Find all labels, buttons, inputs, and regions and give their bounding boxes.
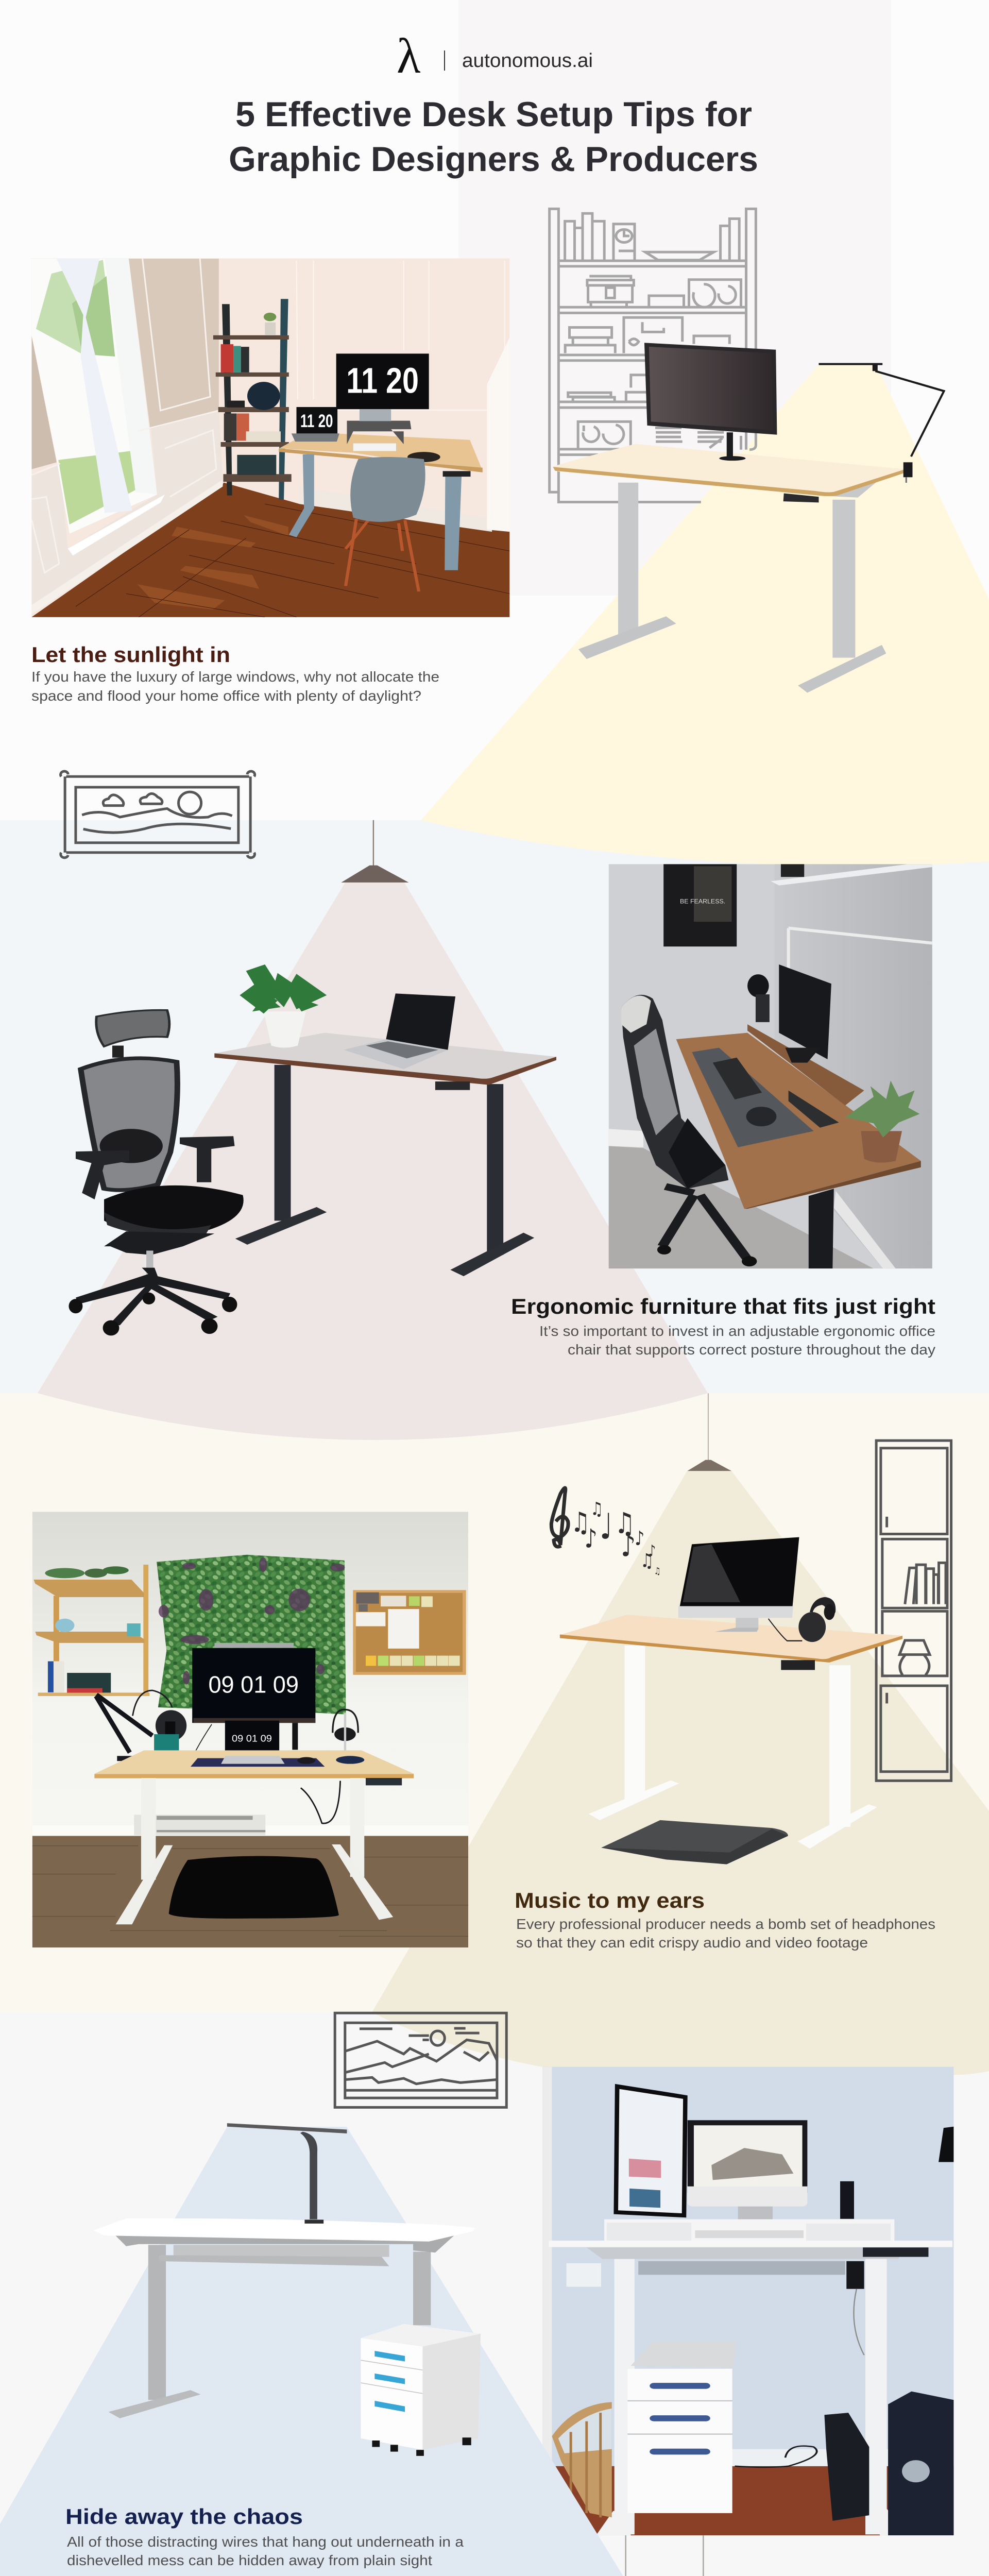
light cone: pendant lamp, section 2: [38, 883, 708, 1440]
basket: [552, 2402, 612, 2517]
photo: sunlit home office: 11 20: [346, 360, 419, 401]
wooden shelves: [143, 1565, 148, 1696]
mic boom arm: [96, 1694, 152, 1753]
desk leg: [809, 1189, 834, 1268]
desk top: [560, 1615, 902, 1662]
photo: producer desk with green wall: [32, 1512, 468, 1947]
logo mark: λ: [397, 28, 421, 83]
desk riser: [604, 2219, 894, 2243]
computer: [680, 1537, 799, 1606]
monitor: [779, 964, 831, 1059]
music notes: ♫: [591, 1499, 603, 1520]
text block: tip 4: All of those distracting wires that hang out underneath in a: [67, 2534, 464, 2550]
text block: tip 4: Hide away the chaos: [65, 2504, 303, 2529]
text block: tip 3: [515, 1888, 935, 1951]
text block: tip 2: Ergonomic furniture that fits just right: [511, 1294, 935, 1318]
headphones: [769, 1619, 802, 1641]
ladder shelf: [222, 304, 232, 496]
desk top: [94, 1750, 414, 1778]
light cone: desk lamp, section 1: [421, 364, 989, 866]
music notes: ♪: [648, 1542, 656, 1560]
desk illustration, section 3: [560, 1537, 902, 1865]
desk top: [93, 2218, 475, 2242]
text block: tip 3: so that they can edit crispy audio and video footage: [516, 1935, 868, 1951]
background: section 3: [0, 1393, 989, 2012]
wood desk: [676, 1033, 921, 1209]
floor: [32, 1836, 468, 1947]
text block: tip 1: space and flood your home office with plenty of daylight?: [31, 688, 421, 704]
text block: tip 3: Every professional producer needs a bomb set of headphones: [516, 1916, 935, 1932]
iMac: [688, 2120, 807, 2193]
hanging lamp, section 5: [606, 2535, 720, 2576]
text block: tip 1: Let the sunlight in: [31, 642, 230, 667]
desk monitors: [336, 353, 429, 409]
laptop: [225, 1721, 279, 1756]
floor: [555, 2466, 953, 2535]
music notes: ♫: [654, 1566, 661, 1577]
text block: tip 1: [31, 642, 439, 704]
filing cabinet: [630, 2342, 737, 2368]
desk illustration, section 1: [553, 343, 944, 693]
logo: [397, 28, 593, 83]
corkboard: [353, 1590, 466, 1675]
background: section 2: [0, 820, 989, 1393]
title: Graphic Designers & Producers: [229, 140, 758, 179]
photo: multi-monitor home office with filing cabinet: [542, 2067, 953, 2535]
monitor light bar: [227, 2123, 347, 2133]
laptop: [386, 993, 455, 1050]
text block: tip 2: chair that supports correct posture throughout the day: [568, 1342, 935, 1358]
background: section 4: [0, 2012, 989, 2576]
desk legs and feet: [578, 479, 886, 693]
potted plant: [264, 1011, 306, 1048]
office chair: [621, 995, 728, 1189]
light cone: desk lamp, section 4: [0, 2127, 653, 2576]
wall sconce: [939, 2127, 953, 2162]
bookcase sketch, section 3: [876, 1440, 951, 1781]
desk illustration, section 4: [93, 2123, 481, 2456]
desk: [279, 432, 483, 471]
photo: sunlit home office: [31, 259, 509, 617]
text block: tip 2: It’s so important to invest in an adjustable ergonomic office: [539, 1323, 935, 1339]
portrait monitor: [613, 2084, 688, 2217]
text block: tip 4: [65, 2504, 464, 2568]
desk legs: [275, 1065, 503, 1255]
text block: tip 3: Music to my ears: [515, 1888, 705, 1912]
frame sketch, section 2: [61, 771, 255, 858]
footrest: [601, 1820, 788, 1865]
monitor on arm, desk top and task lamp: [553, 343, 944, 502]
music notes: ♫: [615, 1506, 635, 1540]
desk top: [214, 1033, 556, 1080]
monitor: [215, 1643, 294, 1648]
logo wordmark: autonomous.ai: [462, 50, 593, 72]
desk legs: [289, 454, 314, 537]
music notes: ♪: [621, 1529, 636, 1564]
plant in terracotta pot: [861, 1131, 902, 1163]
desk top: [549, 2241, 952, 2247]
music notes: ♫: [640, 1550, 654, 1572]
chair: [346, 514, 419, 591]
ergonomic chair, section 2: [69, 1010, 244, 1335]
background: section 1: [0, 0, 989, 820]
desk legs: [141, 1778, 364, 1880]
photo: ergonomic workstation: BE FEARLESS.: [680, 899, 725, 905]
headphones on stand: [333, 1709, 358, 1733]
side wall: [775, 864, 932, 1268]
printer bin and UPS: [888, 2392, 953, 2535]
background: pale panel behind title: [458, 0, 891, 596]
desk illustration, section 2: [214, 964, 556, 1276]
title: 5 Effective Desk Setup Tips for: [235, 95, 752, 134]
cable tray: [174, 2245, 389, 2257]
wall shelf: [771, 864, 932, 886]
music notes: ♩: [600, 1506, 612, 1547]
music notes: ♫: [571, 1507, 590, 1538]
floor mat: [169, 1856, 339, 1919]
framed poster: [663, 864, 737, 946]
green wall: [157, 1555, 346, 1715]
desk mat, keyboard, mouse: [692, 1048, 814, 1147]
baseboard heater: [134, 1815, 265, 1835]
text block: tip 2: [511, 1294, 935, 1358]
floor: [609, 1146, 874, 1268]
text block: tip 1: If you have the luxury of large windows, why not allocate the: [31, 669, 439, 685]
door: [487, 337, 509, 532]
music notes: [551, 1488, 661, 1577]
photo: producer desk with green wall: 09 01 09: [232, 1733, 272, 1743]
shelf sketch, section 1: [550, 209, 756, 502]
floor: [31, 483, 509, 617]
wall panel: [789, 928, 932, 1020]
text block: tip 4: dishevelled mess can be hidden away from plain sight: [67, 2552, 432, 2568]
music notes: ♪: [635, 1527, 644, 1550]
pendant lamp, section 2: [341, 820, 408, 883]
filing cabinet: [361, 2324, 481, 2347]
desk legs: [624, 1646, 850, 1827]
light cone: pendant lamp, section 3: [372, 1471, 989, 2077]
photo: sunlit home office: 11 20: [300, 411, 333, 431]
window wall, window and floorboards: [32, 259, 288, 614]
music notes: ♪: [585, 1523, 598, 1554]
desk legs: [615, 2259, 635, 2534]
speaker: [840, 2181, 854, 2219]
frame sketch, section 4: [335, 2013, 506, 2107]
clock numerals on monitor: 09 01 09: [208, 1671, 299, 1698]
microphone: [747, 974, 769, 997]
title: [229, 95, 758, 179]
wall moulding: [297, 261, 505, 410]
photo: ergonomic workstation: [609, 864, 932, 1268]
pendant lamp, section 3: [687, 1393, 731, 1471]
logo divider: [444, 50, 445, 71]
desk legs: [148, 2245, 431, 2400]
